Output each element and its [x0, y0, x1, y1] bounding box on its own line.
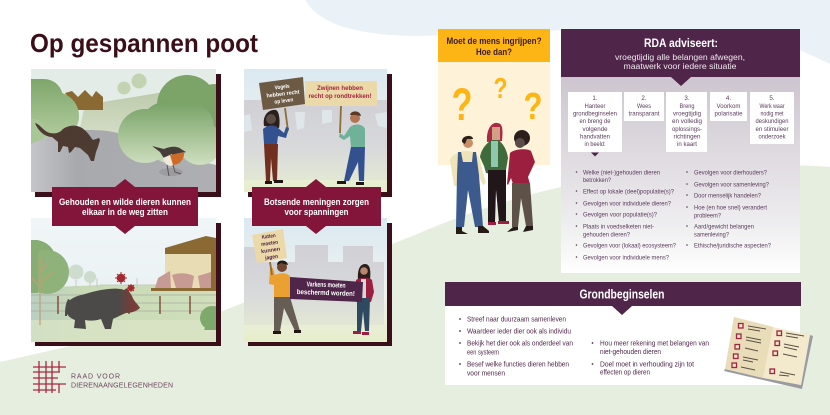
advice box 5: en stimuleer — [756, 126, 788, 133]
list: handles left column: Effect op lokale (deel)populatie(s)? — [583, 188, 674, 196]
panel: principles: Grondbeginselen — [580, 288, 664, 302]
caption: clashing opinions: Botsende meningen zorgen — [264, 197, 369, 207]
sign: birds: op leven — [274, 97, 294, 106]
caption: kept and wild animals — [52, 179, 198, 234]
icon: checklist book — [724, 317, 813, 389]
caption: kept and wild animals: Gehouden en wilde dieren kunnen — [59, 197, 191, 207]
list: handles left column — [576, 170, 676, 262]
advice box 3: vroegtijdig — [673, 110, 702, 118]
panel: should humans intervene: Moet de mens ingrijpen? — [446, 36, 542, 46]
advice box 4: 4. — [726, 95, 731, 102]
panel: conflicting opinions cats and pigs — [244, 218, 392, 346]
figure: woman with sign — [263, 110, 289, 184]
advice box 5 — [750, 92, 794, 144]
sign: boars: recht op rondtrekken! — [308, 93, 372, 100]
banner: Varkens moeten — [306, 281, 346, 290]
sign: cats — [252, 229, 287, 275]
panel: should humans intervene — [438, 29, 550, 234]
list: handles right column — [686, 170, 771, 250]
title: Op gespannen poot — [30, 28, 258, 58]
advice box 3: in kaart — [677, 141, 697, 148]
figure: woman in green jacket — [480, 123, 509, 225]
caption: clashing opinions: voor spanningen — [284, 207, 348, 217]
advice box 1: in beeld: — [584, 141, 606, 148]
logo: DIERENAANGELEGENHEDEN — [71, 382, 173, 390]
list: principles left column: Waardeer ieder dier ook als individu — [467, 326, 571, 336]
list: handles right column: Gevolgen voor samenleving? — [694, 182, 769, 188]
banner — [290, 277, 363, 302]
advice box 5: 5. — [769, 95, 775, 102]
list: principles right column: effecten op dieren — [600, 368, 650, 376]
sign: cats: moeten — [261, 240, 279, 248]
advice box 3: Breng — [680, 103, 695, 110]
advice box 1 — [568, 92, 622, 152]
icon: virus — [115, 272, 135, 292]
list: principles left column — [459, 314, 573, 378]
list: handles left column: Gevolgen voor individuele mens? — [583, 254, 669, 262]
list: principles left column: Bekijk het dier ook als onderdeel van — [467, 338, 573, 348]
panel: principles — [445, 282, 813, 389]
list: principles left column: Besef welke functies dieren hebben — [467, 360, 569, 368]
advice box 1: en breng de — [580, 118, 611, 125]
advice box 3: 3. — [684, 95, 690, 102]
panel: RDA advises: vroegtijdig alle belangen afwegen, — [615, 52, 745, 62]
list: handles right column: Door menselijk handelen? — [694, 192, 761, 200]
list: principles right column: niet-gehouden dieren — [600, 347, 661, 356]
icon: question marks: ? — [494, 73, 508, 105]
logo — [33, 361, 173, 393]
list: handles right column: samenleving? — [694, 232, 729, 238]
icon: robin — [152, 146, 186, 176]
advice box 5: deskundigen — [756, 118, 789, 125]
sign: cats: kunnen — [261, 247, 281, 255]
panel: RDA advises: maatwerk voor iedere situatie — [624, 61, 737, 71]
list: handles left column: Gevolgen voor populatie(s)? — [583, 212, 657, 218]
panel: conflicting opinions birds and boars — [244, 69, 392, 197]
panel: should humans intervene: Hoe dan? — [476, 47, 512, 57]
advice box 3: oplossings- — [672, 126, 702, 133]
figure: man with sign — [337, 111, 365, 185]
sign: boars: Zwijnen hebben — [317, 85, 363, 92]
logo: RAAD VOOR — [71, 374, 120, 380]
sign: boars — [305, 81, 377, 106]
advice box 2 — [624, 92, 664, 121]
list: handles right column: probleem? — [694, 212, 721, 220]
panel: RDA advises: RDA adviseert: — [644, 36, 718, 50]
advice box 5: nodig met — [760, 110, 784, 118]
banner: beschermd worden! — [297, 289, 355, 298]
figure: third person in red sweater — [507, 130, 535, 232]
barn — [151, 236, 216, 291]
panel: cat and robin — [31, 69, 221, 197]
advice box 1: grondbeginselen — [573, 110, 618, 118]
list: handles right column: Ethische/juridische aspecten? — [694, 242, 771, 250]
advice box 5: Werk waar — [760, 103, 784, 110]
list: handles right column: Hoe (en hoe snel) verandert — [694, 204, 767, 212]
list: principles right column: Hou meer rekening met belangen van — [600, 338, 709, 348]
icon: cat — [35, 123, 100, 161]
list: handles left column: Gevolgen voor (lokaal) ecosysteem? — [583, 242, 676, 250]
advice box 1: 1. — [592, 95, 598, 102]
list: handles left column: betrokken? — [583, 177, 611, 184]
icon: question marks: ? — [452, 79, 472, 130]
figure: man in overalls — [450, 136, 489, 234]
figure: woman with banner — [353, 264, 374, 335]
advice box 3: richtingen — [674, 134, 701, 140]
list: principles left column: een systeem — [467, 348, 499, 356]
panel: wild boar near pig barn — [14, 218, 224, 346]
icon: question marks: ? — [524, 86, 542, 128]
icon: wild boar — [65, 288, 140, 329]
sign: birds: hebben recht — [266, 89, 300, 99]
figure: man with sign — [269, 260, 301, 334]
advice box 5: onderzoek — [758, 134, 786, 140]
advice box 1: handvatten — [580, 134, 611, 140]
sign: birds: Vogels — [274, 84, 290, 91]
sign: birds — [259, 77, 305, 110]
tree — [31, 240, 69, 325]
list: principles left column: Streef naar duurzaam samenleven — [467, 314, 566, 324]
list: handles left column: gehouden dieren? — [583, 232, 630, 238]
list: handles right column: Gevolgen voor dierhouders? — [694, 170, 767, 176]
caption: clashing opinions — [252, 179, 381, 234]
advice box 1: volgende — [582, 126, 608, 133]
advice box 4: polarisatie — [714, 110, 743, 118]
list: principles right column: Doel moet in verhouding zijn tot — [600, 360, 694, 368]
list: handles left column: Welke (niet-)gehouden dieren — [583, 170, 660, 176]
advice box 4 — [710, 92, 747, 121]
icon: question marks — [452, 73, 542, 130]
advice box 2: 2. — [641, 95, 647, 102]
advice box 4: Voorkom — [716, 103, 740, 110]
advice box 1: Hanteer — [584, 103, 606, 110]
advice box 3 — [666, 92, 707, 152]
list: handles right column: Aard/gewicht belangen — [694, 224, 754, 230]
list: handles left column: Plaats in voedselketen niet- — [583, 224, 654, 230]
list: principles right column — [592, 338, 709, 376]
caption: kept and wild animals: elkaar in de weg zitten — [82, 207, 168, 217]
sign: cats: Katten — [261, 233, 276, 241]
advice box 2: Wees — [637, 103, 651, 110]
fence — [31, 295, 216, 314]
panel: RDA advises — [561, 29, 800, 273]
advice box 3: en volledig — [672, 118, 703, 125]
sign: cats: jagen — [264, 254, 279, 262]
advice box 2: transparant — [628, 110, 660, 118]
list: handles left column: Gevolgen voor individuele dieren? — [583, 200, 671, 208]
list: principles left column: voor mensen — [467, 368, 505, 378]
